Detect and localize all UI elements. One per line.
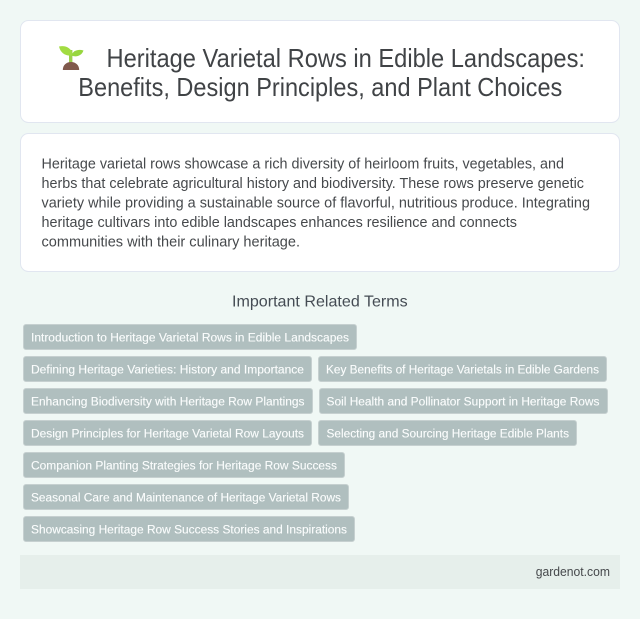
tag: seasonal care: Seasonal Care and Maintenance of Heritage Varietal Rows	[31, 490, 341, 504]
title	[78, 45, 585, 102]
heading: important related terms: Important Related Terms	[232, 294, 408, 310]
tag: defining heritage varieties: Defining Heritage Varieties: History and Importance	[31, 362, 304, 376]
tag: introduction	[24, 324, 356, 350]
tag: success stories: Showcasing Heritage Row Success Stories and Inspirations	[31, 522, 347, 536]
panel: introduction text	[20, 134, 620, 272]
tag: defining heritage varieties	[24, 356, 312, 382]
text block: introduction: variety while providing a sustainable source of flavorful, nutritious produce. Integrating	[42, 195, 590, 211]
tag: soil health: Soil Health and Pollinator Support in Heritage Rows	[326, 394, 600, 408]
text block: introduction: Heritage varietal rows showcase a rich diversity of heirloom fruits, vegetables, and	[42, 156, 564, 172]
tag: companion planting: Companion Planting Strategies for Heritage Row Success	[31, 458, 337, 472]
icon: seedling	[59, 46, 84, 70]
title: Heritage Varietal Rows in Edible Landscapes:	[106, 45, 585, 73]
tag: key benefits: Key Benefits of Heritage Varietals in Edible Gardens	[326, 362, 599, 376]
text block: introduction: herbs that celebrate agricultural history and biodiversity. These rows preserve genetic	[42, 176, 585, 192]
tag: enhancing biodiversity	[24, 388, 312, 414]
title: Benefits, Design Principles, and Plant Choices	[78, 74, 562, 102]
tag: soil health	[320, 388, 608, 414]
tag: key benefits	[318, 356, 606, 382]
panel: title card	[20, 20, 620, 122]
text block: introduction	[42, 156, 590, 250]
text block: introduction: communities with their culinary heritage.	[42, 234, 300, 250]
tag: selecting and sourcing: Selecting and Sourcing Heritage Edible Plants	[326, 426, 569, 440]
tag: design principles	[24, 420, 312, 446]
tag: success stories	[24, 516, 354, 542]
footer: gardenot.com	[536, 565, 610, 579]
tag: introduction: Introduction to Heritage Varietal Rows in Edible Landscapes	[31, 330, 349, 344]
tag list	[24, 324, 608, 542]
text block: introduction: heritage cultivars into edible landscapes enhances resilience and connects	[42, 215, 517, 231]
tag: companion planting	[24, 452, 344, 478]
tag: seasonal care	[24, 484, 348, 510]
tag: design principles: Design Principles for Heritage Varietal Row Layouts	[31, 426, 304, 440]
tag: selecting and sourcing	[318, 420, 576, 446]
footer	[20, 555, 620, 589]
tag: enhancing biodiversity: Enhancing Biodiversity with Heritage Row Plantings	[31, 394, 304, 408]
